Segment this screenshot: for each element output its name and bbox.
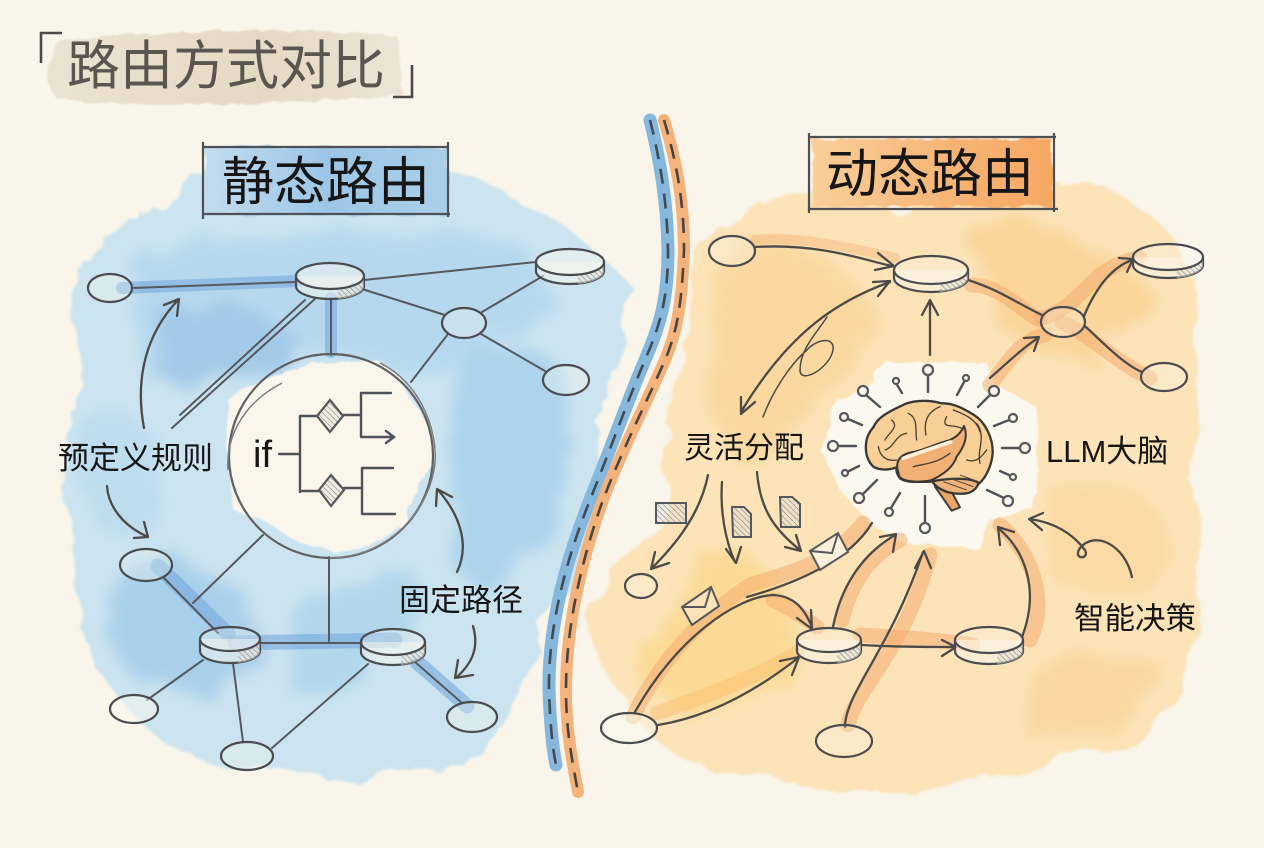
- arrow down to path: [455, 626, 475, 678]
- dynamic node shapes: [601, 236, 1203, 757]
- label: fixed path: 固定路径: [399, 583, 523, 618]
- heading: dynamic routing: 动态路由: [826, 146, 1034, 204]
- decision circle: if rules: [228, 354, 435, 558]
- icon: envelope: [810, 533, 848, 570]
- icon: brain with radiating nodes: [828, 365, 1030, 533]
- decision tree: [279, 393, 395, 514]
- label: LLM brain: LLM大脑: [1046, 434, 1168, 469]
- icon: envelope: [656, 503, 686, 523]
- icon: document: [780, 497, 800, 527]
- chart: dynamic network: [601, 236, 1203, 757]
- arrow up to path: [141, 299, 179, 428]
- heading: static routing: [203, 142, 450, 219]
- heading: dynamic routing: [808, 133, 1058, 213]
- central dividing road: [549, 120, 684, 792]
- brain: [866, 401, 993, 511]
- node shapes: [88, 249, 604, 770]
- label: predefined rules: [58, 299, 213, 538]
- curled arrow: [1029, 513, 1132, 577]
- icon: envelope: [682, 587, 719, 625]
- panel: static routing watercolor wash: [64, 172, 635, 781]
- dynamic links and arrows: [635, 246, 1142, 727]
- highlighted fixed paths: [122, 281, 467, 706]
- label: smart decision: 智能决策: [1074, 602, 1196, 636]
- white centre of rule circle: [227, 360, 433, 553]
- icons: letters and documents: [656, 497, 848, 625]
- label: flexible allocation: [651, 432, 804, 569]
- radiating pins: [828, 365, 1030, 533]
- title wash: [48, 31, 402, 105]
- orange flow ribbons: [633, 239, 1150, 725]
- title block: [41, 31, 412, 105]
- dispatch arrows: [651, 475, 708, 569]
- if label: if: [253, 434, 272, 476]
- arrow up to circle: [436, 489, 463, 572]
- arrow down to node: [107, 486, 148, 538]
- label: predefined rules: 预定义规则: [58, 441, 213, 476]
- label: smart decision: [1029, 513, 1196, 636]
- panel: dynamic routing watercolor wash: [590, 178, 1200, 791]
- white halo behind the brain: [820, 362, 1038, 550]
- label: fixed path: [399, 489, 523, 678]
- label: flexible allocation: 灵活分配: [684, 432, 804, 465]
- network links: [132, 262, 545, 748]
- icon: document: [732, 507, 751, 537]
- chart: static network: [88, 249, 604, 770]
- title block: 路由方式对比: [67, 37, 385, 96]
- heading: static routing: 静态路由: [222, 154, 430, 212]
